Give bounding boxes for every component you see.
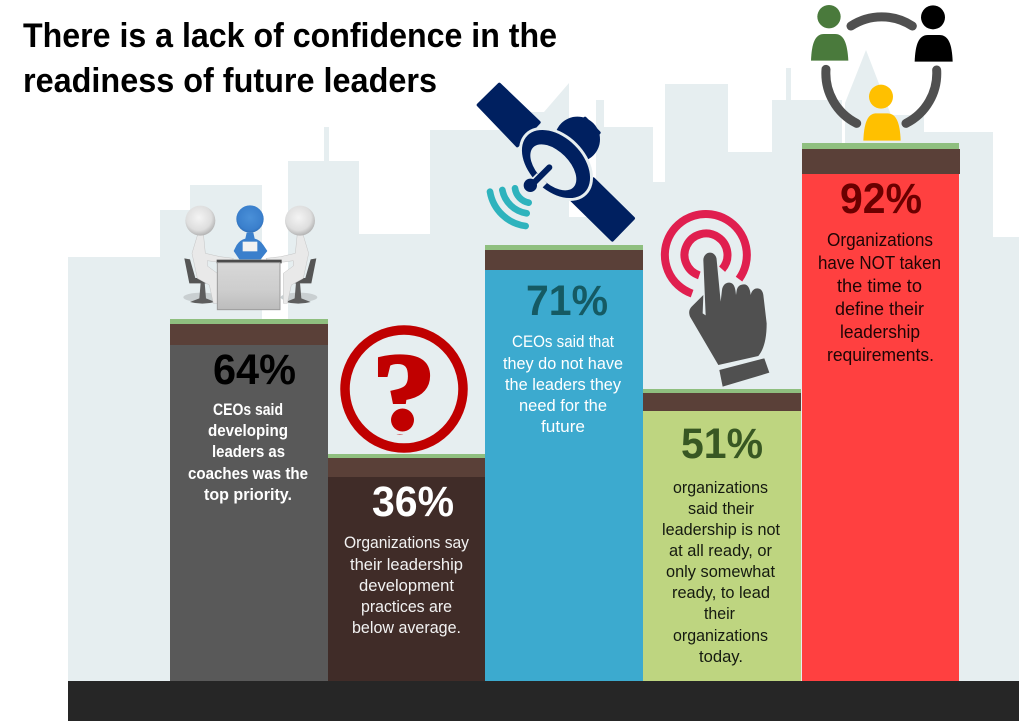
description: 64% <box>188 400 308 504</box>
icon: question mark in circle: ? <box>373 331 435 455</box>
description: 92% <box>818 230 941 365</box>
description: 51%: only somewhat <box>666 562 775 581</box>
description: 36%: below average. <box>352 618 461 637</box>
description: 51% <box>662 478 780 666</box>
description: 92%: the time to <box>837 276 922 296</box>
description: 71%: they do not have <box>503 354 623 373</box>
description: 71%: need for the <box>519 396 607 415</box>
description: 64%: leaders as <box>212 442 285 461</box>
description: 51%: organizations <box>673 626 768 645</box>
title: readiness of future leaders <box>23 62 437 100</box>
stat: 64%: 64% <box>213 346 296 394</box>
stat: 71%: 71% <box>526 277 608 325</box>
icon: meeting at a table <box>183 205 317 310</box>
icon: three connected people <box>811 5 953 141</box>
description: 36%: their leadership <box>350 555 463 574</box>
panel: 71% CEOs <box>485 245 643 681</box>
panel: 64% CEOs <box>170 319 328 681</box>
icon: satellite <box>478 84 633 240</box>
stat: 36%: 36% <box>372 478 454 526</box>
description: 92%: have NOT taken <box>818 253 941 273</box>
description: 36%: practices are <box>361 597 452 616</box>
description: 92%: requirements. <box>827 345 934 365</box>
description: 51%: today. <box>699 647 743 666</box>
description: 51%: leadership is not <box>662 520 780 539</box>
description: 64%: coaches was the <box>188 464 308 483</box>
description: 51%: ready, to lead <box>672 583 770 602</box>
description: 64%: CEOs said <box>213 400 283 419</box>
description: 51%: their <box>704 604 735 623</box>
description: 71%: CEOs said that <box>512 332 614 351</box>
ground strip <box>68 681 1019 721</box>
description: 64%: developing <box>208 421 288 440</box>
panel: 51% organizations <box>643 389 801 681</box>
description: 92%: Organizations <box>827 230 933 250</box>
description: 51%: at all ready, or <box>669 541 772 560</box>
icon: question mark in circle <box>345 330 463 455</box>
description: 36%: development <box>359 576 454 595</box>
description: 36%: Organizations say <box>344 533 469 552</box>
panel: 92% organizations <box>802 143 960 681</box>
description: 71%: the leaders they <box>505 375 621 394</box>
title <box>23 17 557 100</box>
panel: 36% organizations <box>328 454 485 681</box>
description: 92%: define their <box>835 299 924 319</box>
description: 92%: leadership <box>840 322 920 342</box>
stat: 92%: 92% <box>840 175 922 223</box>
description: 71% <box>503 332 623 436</box>
stat: 51%: 51% <box>681 420 763 468</box>
title: There is a lack of confidence in the <box>23 17 557 55</box>
description: 51%: organizations <box>673 478 768 497</box>
description: 71%: future <box>541 417 585 436</box>
description: 64%: top priority. <box>204 485 292 504</box>
description: 36% <box>344 533 469 637</box>
description: 51%: said their <box>688 499 754 518</box>
icon: hand pressing target <box>665 214 769 387</box>
